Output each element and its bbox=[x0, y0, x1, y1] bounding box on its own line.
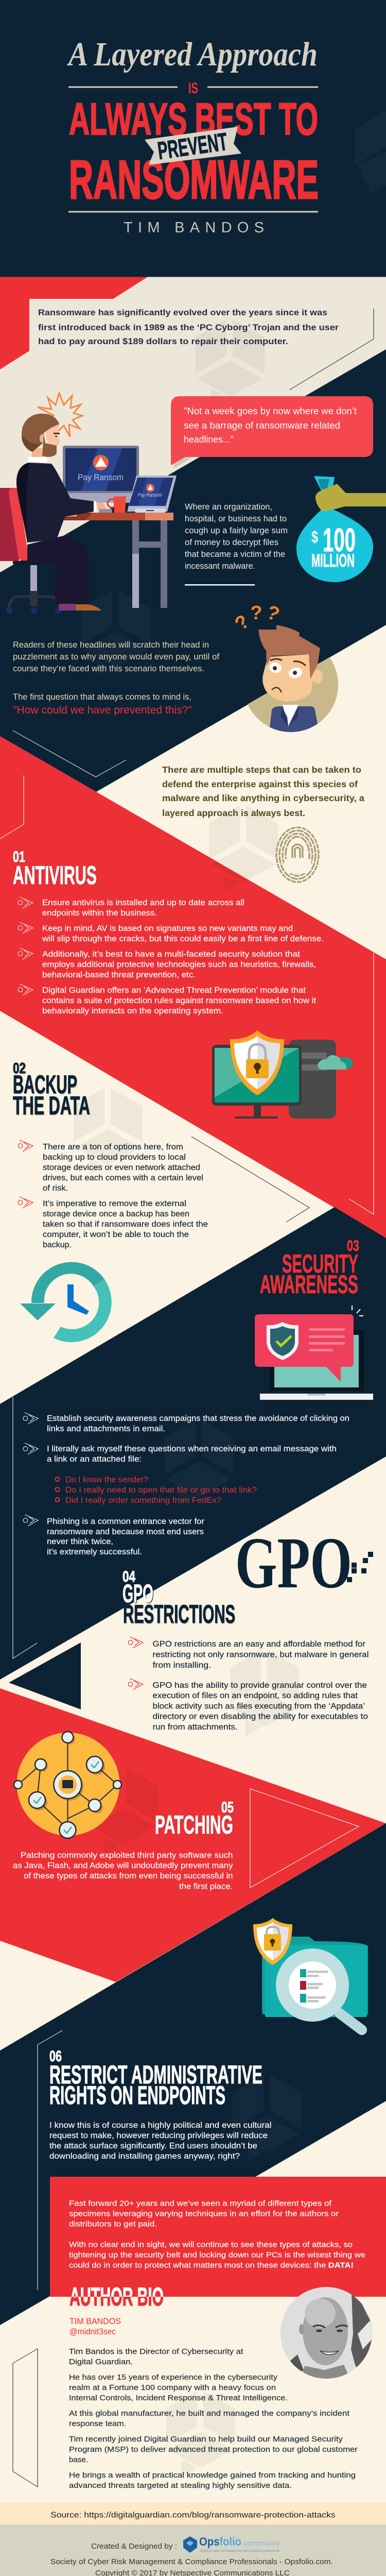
bio paragraphs: Digital Guardian. bbox=[69, 2358, 133, 2366]
bio paragraphs: base. bbox=[69, 2455, 88, 2464]
question marks bbox=[231, 601, 283, 635]
bio paragraphs: advanced threats targeted at stealing highly sensitive data. bbox=[69, 2481, 292, 2490]
bullets 02: storage device once a backup has been bbox=[43, 1210, 189, 1218]
text: organization paragraph bbox=[185, 502, 288, 585]
red sub-questions: Did I really order something from FedEx? bbox=[65, 1496, 221, 1505]
bullets 02: computer, it won’t be able to touch the bbox=[43, 1230, 189, 1239]
heading 02: THE DATA bbox=[13, 1091, 90, 1120]
speech bubble quote: "Not a week goes by now where we don’t bbox=[184, 406, 357, 416]
bullets 03: links and attachments in email. bbox=[47, 1425, 165, 1433]
text: organization paragraph: incessant malware. bbox=[185, 562, 255, 571]
heading 01: ANTIVIRUS bbox=[13, 861, 97, 890]
heading 04 bbox=[122, 1568, 235, 1629]
question marks: ? bbox=[231, 611, 254, 635]
bullets 03: Phishing is a common entrance vector for bbox=[47, 1517, 204, 1526]
paragraph 06: I know this is of course a highly political and even cultural bbox=[49, 2121, 272, 2130]
illustration: stressed man at desk bbox=[0, 393, 177, 614]
author name and handle: @midnit3sec bbox=[69, 2327, 116, 2336]
text: organization paragraph: Where an organization, bbox=[185, 502, 272, 512]
text: multiple steps: defend the enterprise against this species of bbox=[162, 779, 358, 789]
bullets 03: a link or an attached file: bbox=[47, 1455, 142, 1464]
logo: opsfolio: Opsfolio bbox=[199, 2535, 241, 2548]
bullets 04 bbox=[128, 1637, 369, 1732]
bullets 03: I literally ask myself these questions when receiving an email message with bbox=[47, 1445, 337, 1453]
intro text bbox=[38, 308, 339, 346]
chair bbox=[0, 488, 71, 614]
laptop bbox=[127, 476, 177, 513]
author photo bbox=[280, 2287, 372, 2379]
title rule right bbox=[207, 87, 318, 88]
bullets 04: GPO restrictions are an easy and affordable method for bbox=[152, 1640, 365, 1649]
bullets 01: will slip through the cracks, but this could easily be a first line of defense. bbox=[42, 935, 324, 943]
paragraph 06: request to make, however reducing privileges will reduce bbox=[49, 2131, 268, 2140]
heading 06: RIGHTS ON ENDPOINTS bbox=[49, 2081, 225, 2110]
bullets 01 bbox=[18, 897, 324, 1015]
bullets 02: storage devices or even network attached bbox=[43, 1163, 200, 1172]
title word IS: IS bbox=[188, 80, 198, 97]
monitor: Pay Ransom bbox=[78, 472, 124, 482]
bullets 02: There are a ton of options here, from bbox=[43, 1143, 183, 1151]
bio paragraphs: At this global manufacturer, he built and managed the company’s incident bbox=[69, 2409, 350, 2418]
heading 05 bbox=[155, 1799, 234, 1839]
red panel conclusion text bbox=[69, 2199, 365, 2270]
logo: opsfolio: community bbox=[243, 2539, 280, 2547]
paragraph 05: the first place. bbox=[179, 1883, 233, 1891]
icon: money bag $100 million: $ bbox=[311, 528, 318, 546]
bullets 01: behavioral-based threat prevention, etc. bbox=[42, 971, 196, 979]
bullets 04: execution of files on an endpoint, so adding rules that bbox=[152, 1691, 358, 1700]
text: multiple steps: malware and like anything in cybersecurity, a bbox=[162, 793, 364, 803]
paragraph 05: of these types of attacks from even being successful in bbox=[24, 1872, 233, 1880]
source line: Source: https://digitalguardian.com/blog/ransomware-protection-attacks bbox=[50, 2511, 336, 2519]
author name and handle: TIM BANDOS bbox=[69, 2317, 121, 2326]
society line: Society of Cyber Risk Management & Compliance Professionals - Opsfolio.com. bbox=[50, 2557, 333, 2566]
intro text: first introduced back in 1989 as the ‘PC Cyborg’ Trojan and the user bbox=[38, 323, 339, 332]
text: multiple steps: There are multiple steps that can be taken to bbox=[162, 765, 361, 775]
bio paragraphs: Program (MSP) to deliver advanced threat protection to our global customer bbox=[69, 2445, 358, 2454]
bullets 04: from installing. bbox=[152, 1661, 211, 1670]
red sub-questions: Do I know the sender? bbox=[65, 1476, 148, 1484]
illustration: patching network bbox=[14, 1732, 121, 1838]
red panel conclusion text: distributors to get paid. bbox=[69, 2219, 157, 2229]
bullets 01: Keep in mind, AV is based on signatures so new variants may and bbox=[42, 924, 293, 933]
bullets 04: directory or even disabling the ability for executables to bbox=[152, 1713, 368, 1721]
ribbon prevent bbox=[145, 127, 241, 165]
icon: backup clock bbox=[20, 1262, 112, 1342]
text: multiple steps bbox=[162, 765, 364, 818]
intro text: had to pay around $189 dollars to repair their computer. bbox=[38, 337, 288, 346]
question marks: ? bbox=[264, 601, 283, 626]
text: organization paragraph: of money to decrypt files bbox=[185, 538, 278, 547]
mug bbox=[108, 496, 126, 513]
bullets 01: endpoints within the business. bbox=[42, 909, 157, 918]
bullets 02: of risk. bbox=[43, 1184, 68, 1193]
text: readers paragraph: The first question that always comes to mind is, bbox=[13, 692, 191, 702]
bullets 03: it’s extremely successful. bbox=[47, 1548, 142, 1556]
text: organization paragraph: hospital, or business had to bbox=[185, 514, 287, 523]
heading 02: BACKUP bbox=[13, 1070, 77, 1099]
bio paragraphs: He brings a wealth of practical knowledge gained from tracking and hunting bbox=[69, 2471, 356, 2480]
title rule lower bbox=[68, 211, 318, 212]
red panel conclusion text: With no clear end in sight, we will continue to see these types of attacks, so bbox=[69, 2240, 353, 2249]
red panel conclusion text: specimens leveraging varying techniques in an effort for the authors or bbox=[69, 2209, 339, 2218]
author name and handle bbox=[69, 2317, 121, 2336]
title block bbox=[67, 36, 319, 236]
bio paragraphs: Internal Controls, Incident Response & Threat Intelligence. bbox=[69, 2394, 288, 2402]
bullets 02: drives, but each comes with a certain level bbox=[43, 1174, 203, 1182]
heading 01 bbox=[13, 849, 97, 890]
monitor bbox=[63, 446, 139, 503]
bullets 01: Additionally, it’s best to have a multi-faceted security solution that bbox=[42, 950, 301, 959]
red panel conclusion text: tightening up the security belt and locking down our PCs is the wisest thing we bbox=[69, 2250, 365, 2260]
bullets 04: GPO has the ability to provide granular control over the bbox=[152, 1681, 367, 1690]
laptop: Pay Ransom bbox=[138, 492, 162, 498]
created by: Created & Designed by : bbox=[91, 2542, 177, 2551]
bio paragraphs bbox=[69, 2347, 358, 2490]
logo: opsfolio bbox=[183, 2535, 280, 2553]
question marks: ? bbox=[250, 602, 262, 624]
heading 03: 03 bbox=[347, 1238, 359, 1255]
speech bubble quote bbox=[171, 396, 373, 468]
bullets 01: behaviorally interacts on the operating system. bbox=[42, 1007, 223, 1015]
heading 01: 01 bbox=[13, 849, 25, 866]
text: readers paragraph: course they’re faced with this scenario themselves. bbox=[13, 664, 204, 673]
bullets 04: block activity such as files executing from the ‘Appdata’ bbox=[152, 1702, 365, 1710]
intro text: Ransomware has significantly evolved over the years since it was bbox=[38, 308, 327, 317]
title rule left bbox=[68, 87, 178, 88]
bullets 02 bbox=[18, 1140, 208, 1249]
paragraph 05 bbox=[13, 1851, 233, 1891]
bullets 01: contains a suite of protection rules against ransomware based on how it bbox=[42, 996, 317, 1005]
illustration: confused man bbox=[231, 601, 338, 732]
bio paragraphs: realm at a Fortune 100 company with a heavy focus on bbox=[69, 2383, 276, 2392]
author bio bbox=[69, 2282, 372, 2490]
heading 04: GPO bbox=[122, 1579, 153, 1608]
heading 06 bbox=[49, 2048, 262, 2110]
bullets 03 bbox=[23, 1413, 349, 1556]
section 03: security awareness bbox=[23, 1238, 373, 1556]
author name: TIM BANDOS bbox=[124, 219, 264, 236]
red sub-questions bbox=[56, 1476, 257, 1505]
bullets 02: taken so that if ransomware does infect the bbox=[43, 1220, 208, 1229]
paragraph 06: the attack surface significantly. End users shouldn’t be bbox=[49, 2142, 257, 2150]
text: readers paragraph: Readers of these headlines will scratch their head in bbox=[13, 640, 209, 650]
bullets 02: backup. bbox=[43, 1241, 72, 1249]
icon: money bag $100 million: 100 bbox=[323, 521, 356, 558]
text: readers paragraph bbox=[13, 640, 219, 716]
bio paragraphs: response team. bbox=[69, 2419, 126, 2428]
paragraph 05: as Java, Flash, and Adobe will undoubtedly prevent many bbox=[13, 1861, 233, 1870]
heading 03 bbox=[260, 1238, 359, 1299]
paragraph 05: Patching commonly exploited third party software such bbox=[21, 1851, 233, 1860]
illustration: shield computer cloud bbox=[212, 1030, 353, 1118]
red panel conclusion text: Fast forward 20+ years and we’ve seen a myriad of different types of bbox=[69, 2199, 332, 2208]
question callout: "How could we have prevented this?" bbox=[13, 704, 192, 716]
heading 05: 05 bbox=[221, 1799, 234, 1816]
title script line: A Layered Approach bbox=[67, 36, 318, 73]
burst bbox=[38, 393, 82, 437]
red sub-questions: Do I really need to open that file or go to that link? bbox=[65, 1486, 257, 1495]
section 01: antivirus bbox=[13, 849, 324, 1015]
speech bubble quote: headlines..." bbox=[184, 434, 234, 445]
speech bubble quote: see a barrage of ransomware related bbox=[184, 420, 340, 431]
illustration: alert laptop bbox=[255, 1306, 373, 1400]
desk bbox=[58, 513, 173, 608]
bullets 01: employs additional protective technologies such as heuristics, firewalls, bbox=[42, 960, 316, 969]
bio paragraphs: Tim Bandos is the Director of Cybersecurity at bbox=[69, 2347, 243, 2356]
heading 04: 04 bbox=[122, 1568, 135, 1585]
icon: money bag $100 million bbox=[296, 476, 386, 582]
icon: money bag $100 million: MILLION bbox=[311, 551, 355, 571]
text: organization paragraph: cough up a fairly large sum bbox=[185, 526, 288, 535]
bullets 03: ransomware and because most end users bbox=[47, 1528, 204, 1536]
heading 02 bbox=[13, 1060, 90, 1120]
bullets 03: Establish security awareness campaigns that stress the avoidance of clicking on bbox=[47, 1414, 349, 1423]
heading author bio: AUTHOR BIO bbox=[69, 2282, 164, 2311]
icon: fingerprint bbox=[276, 827, 319, 882]
section 02: backup the data bbox=[13, 1060, 208, 1249]
bio paragraphs: Tim recently joined Digital Guardian to help build our Managed Security bbox=[69, 2435, 343, 2444]
footer bbox=[50, 2535, 333, 2576]
illustration: folder with shield and magnifier bbox=[253, 1918, 368, 2030]
section 04: GPO restrictions bbox=[122, 1568, 369, 1732]
text: organization paragraph: that became a victim of the bbox=[185, 550, 285, 559]
section 05: patching bbox=[13, 1799, 234, 1891]
bullets 01: Digital Guardian offers an ‘Advanced Threat Prevention’ module that bbox=[42, 986, 306, 995]
text: readers paragraph: puzzlement as to why anyone would even pay, until of bbox=[13, 652, 219, 662]
bio paragraphs: He has over 15 years of experience in the cybersecurity bbox=[69, 2373, 278, 2382]
paragraph 06: downloading and installing games anyway, right? bbox=[49, 2152, 240, 2161]
heading 04: RESTRICTIONS bbox=[123, 1600, 235, 1629]
heading 02: 02 bbox=[13, 1060, 26, 1077]
bullets 01: Ensure antivirus is installed and up to date across all bbox=[42, 899, 244, 907]
ribbon prevent: PREVENT bbox=[156, 128, 229, 165]
bullets 03: never think twice, bbox=[47, 1537, 113, 1546]
heading 05: PATCHING bbox=[155, 1810, 233, 1839]
paragraph 06 bbox=[49, 2121, 272, 2161]
bullets 04: run from attachments. bbox=[152, 1723, 238, 1732]
text: multiple steps: layered approach is always best. bbox=[162, 808, 305, 818]
heading 06: 06 bbox=[49, 2048, 62, 2065]
bullets 02: backing up to cloud providers to local bbox=[43, 1153, 186, 1162]
bullets 02: It’s imperative to remove the external bbox=[43, 1199, 186, 1208]
man figure bbox=[16, 414, 112, 611]
red panel conclusion text: could do in order to protect what matters most on these devices: the DATA! bbox=[69, 2261, 354, 2270]
section 06: restrict administrative rights bbox=[49, 2048, 272, 2161]
logo: opsfolio: Society of cyber risk management and compliance professionals bbox=[200, 2550, 280, 2553]
bullets 04: restricting not only ransomware, but malware in general bbox=[152, 1651, 369, 1659]
